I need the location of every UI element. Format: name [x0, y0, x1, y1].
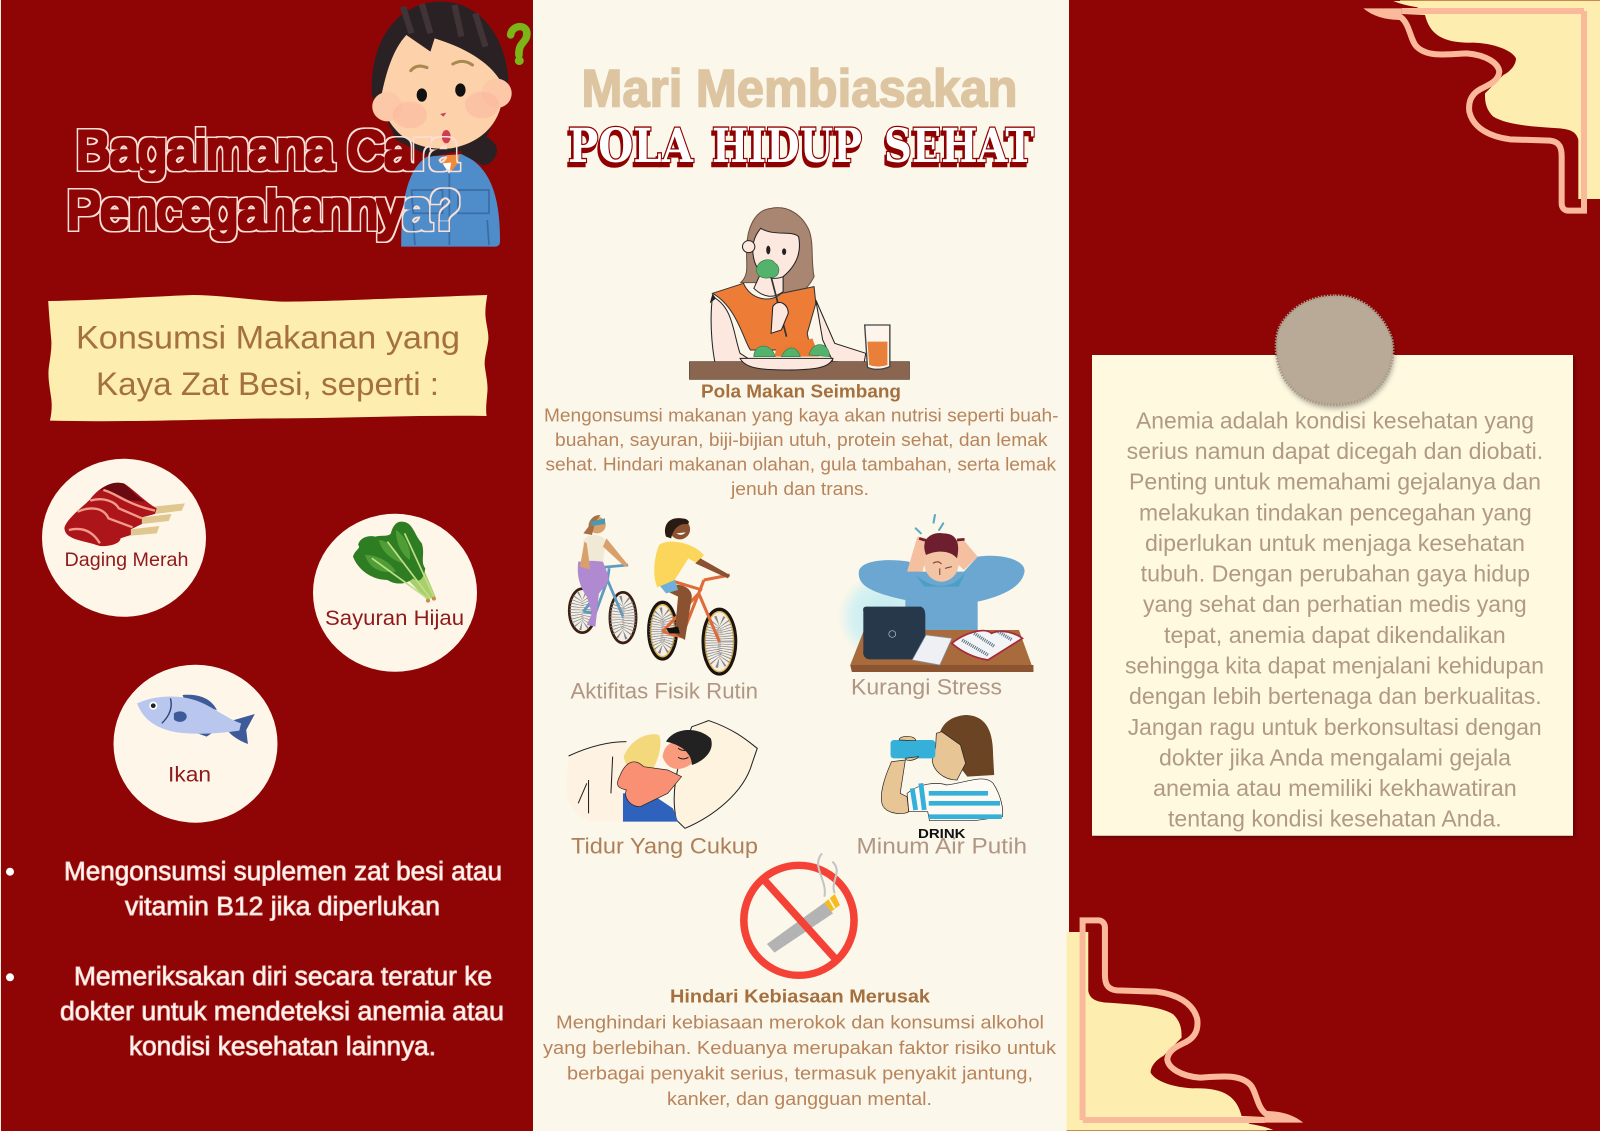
food item: green vegetables: Sayuran Hijau	[325, 607, 464, 630]
title: Bagaimana Cara Pencegahannya?: Bagaimana Cara	[76, 120, 459, 180]
banner: iron-rich food: Konsumsi Makanan yang	[76, 319, 460, 355]
section: balanced diet text: Pola Makan Seimbang	[701, 382, 901, 402]
food item: red meat: Daging Merah	[64, 549, 188, 571]
panel: left, prevention	[0, 0, 527, 1131]
section: avoid bad habits text: berbagai penyakit serius, termasuk penyakit jantung,	[567, 1063, 1033, 1083]
item: drink water: Minum Air Putih	[856, 833, 1027, 858]
title: Bagaimana Cara Pencegahannya?	[67, 120, 459, 240]
bullet list: supplements and check-ups: Mengonsumsi suplemen zat besi atau	[64, 858, 502, 886]
section: balanced diet text: buahan, sayuran, biji-bijian utuh, protein sehat, dan lemak	[555, 430, 1049, 450]
food item: green vegetables	[313, 514, 477, 672]
banner: iron-rich food	[48, 295, 488, 421]
illustration: stressed student at desk	[838, 515, 1033, 672]
section: avoid bad habits text: yang berlebihan. Keduanya merupakan faktor risiko untuk	[543, 1038, 1057, 1058]
text block: anemia summary: sehingga kita dapat menjalani kehidupan	[1125, 652, 1544, 678]
banner: iron-rich food: Kaya Zat Besi, seperti :	[96, 366, 439, 402]
text block: anemia summary: Jangan ragu untuk berkonsultasi dengan	[1128, 714, 1542, 740]
text block: anemia summary: tentang kondisi kesehatan Anda.	[1168, 806, 1502, 832]
food item: fish	[114, 665, 278, 823]
text block: anemia summary: dokter jika Anda mengalami gejala	[1159, 744, 1511, 770]
bullet list: supplements and check-ups	[6, 858, 504, 1061]
bullet list: supplements and check-ups: Memeriksakan diri secara teratur ke	[74, 963, 492, 991]
bullet list: supplements and check-ups: kondisi kesehatan lainnya.	[129, 1033, 436, 1061]
heading: Pola Hidup Sehat: SEHAT	[884, 119, 1034, 174]
panel: center, healthy lifestyle	[533, 0, 1069, 1131]
illustration: woman eating	[689, 208, 909, 379]
illustration: cyclists	[569, 515, 736, 674]
section: avoid bad habits text: Hindari Kebiasaan Merusak	[670, 985, 931, 1006]
tape: round grey sticker	[1276, 296, 1393, 405]
text block: anemia summary: melakukan tindakan pencegahan yang	[1139, 499, 1532, 525]
icon: question mark	[511, 27, 527, 65]
illustration: person drinking	[881, 715, 1003, 821]
item: enough sleep: Tidur Yang Cukup	[571, 833, 758, 858]
food item: fish: Ikan	[168, 763, 211, 787]
section: avoid bad habits text	[543, 985, 1057, 1109]
item: drink water	[856, 715, 1027, 858]
bullet list: supplements and check-ups: dokter untuk mendeteksi anemia atau	[60, 998, 504, 1026]
section: avoid bad habits text: Menghindari kebiasaan merokok dan konsumsi alkohol	[556, 1012, 1044, 1032]
item: physical activity	[569, 515, 758, 703]
text block: anemia summary: anemia atau memiliki kekhawatiran	[1153, 775, 1517, 801]
section: balanced diet text: Mengonsumsi makanan yang kaya akan nutrisi seperti buah-	[544, 406, 1058, 426]
heading: Pola Hidup Sehat: POLA	[568, 119, 693, 174]
icon: no smoking	[744, 853, 854, 975]
label: DRINK: DRINK	[918, 827, 966, 841]
item: enough sleep	[566, 721, 758, 858]
section: balanced diet text: jenuh dan trans.	[730, 479, 869, 499]
food item: red meat	[42, 459, 206, 617]
illustration: thinking woman	[372, 2, 527, 247]
icon: fish	[137, 695, 255, 744]
heading: Pola Hidup Sehat: HIDUP	[712, 119, 862, 174]
decorative corner: bottom left	[1067, 920, 1303, 1131]
bullet list: supplements and check-ups: vitamin B12 jika diperlukan	[125, 893, 440, 921]
text block: anemia summary: tubuh. Dengan perubahan gaya hidup	[1141, 561, 1530, 587]
heading: Pola Hidup Sehat	[568, 119, 1034, 174]
text block: anemia summary	[1125, 407, 1544, 832]
text block: anemia summary: Anemia adalah kondisi kesehatan yang	[1136, 407, 1534, 433]
icon: meat	[64, 483, 185, 546]
icon: spinach	[353, 522, 436, 603]
section: balanced diet text: sehat. Hindari makanan olahan, gula tambahan, serta lemak	[546, 455, 1057, 475]
section: avoid bad habits text: kanker, dan gangguan mental.	[667, 1089, 932, 1109]
text block: anemia summary: tepat, anemia dapat dikendalikan	[1164, 622, 1506, 648]
item: reduce stress	[838, 515, 1033, 699]
text block: anemia summary: dengan lebih bertenaga dan berkualitas.	[1129, 683, 1542, 709]
text block: anemia summary: serius namun dapat dicegah dan diobati.	[1127, 438, 1543, 464]
text block: anemia summary: yang sehat dan perhatian medis yang	[1143, 591, 1527, 617]
panel: right, anemia note card	[1092, 296, 1573, 836]
text block: anemia summary: diperlukan untuk menjaga kesehatan	[1145, 530, 1525, 556]
item: physical activity: Aktifitas Fisik Rutin	[570, 678, 758, 703]
item: reduce stress: Kurangi Stress	[851, 674, 1002, 699]
title: Bagaimana Cara Pencegahannya?: Pencegahannya?	[67, 180, 459, 240]
illustration: sleeping person	[566, 721, 757, 828]
decorative corner: top right	[1363, 0, 1600, 211]
text block: anemia summary: Penting untuk memahami gejalanya dan	[1129, 469, 1541, 495]
section: balanced diet text	[544, 382, 1058, 499]
heading: Mari Membiasakan: Mari Membiasakan	[582, 60, 1018, 119]
